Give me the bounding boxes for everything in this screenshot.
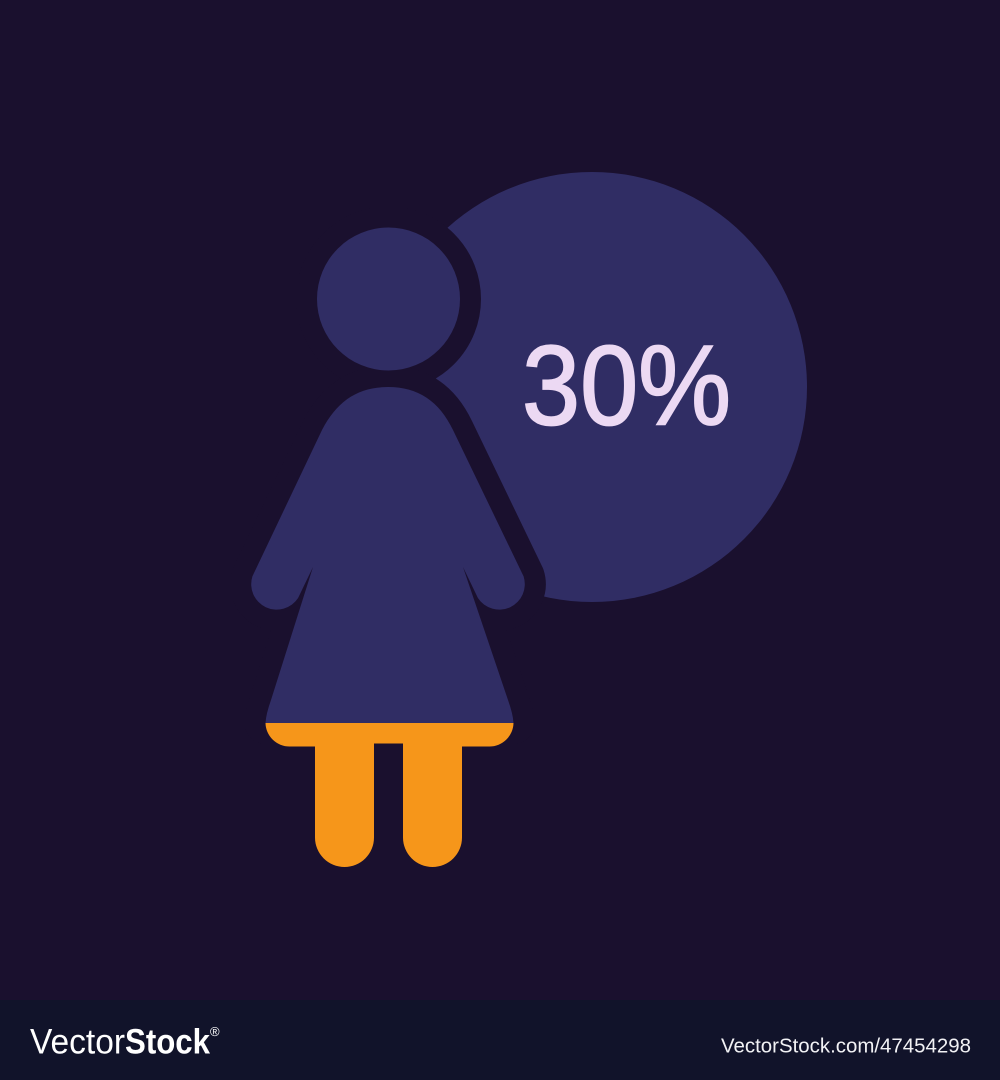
figure body: filled purple portion bbox=[251, 387, 525, 723]
image id: VectorStock.com/47454298 bbox=[721, 1036, 971, 1058]
woman figure chart bbox=[251, 228, 525, 867]
footer bar bbox=[0, 1000, 1000, 1080]
percentage label: 30% bbox=[522, 322, 731, 448]
figure head bbox=[317, 228, 460, 370]
bubble circle bbox=[377, 172, 807, 602]
figure lower portion: orange 30% bbox=[266, 723, 514, 867]
footer logo: Vector bbox=[30, 1022, 125, 1062]
figure halo cutting into bubble bbox=[251, 228, 525, 723]
footer logo bold: Stock bbox=[125, 1022, 210, 1062]
footer background bbox=[0, 1000, 1000, 1080]
registered mark: ® bbox=[210, 1024, 220, 1039]
pie bubble: 30% bbox=[377, 172, 807, 602]
